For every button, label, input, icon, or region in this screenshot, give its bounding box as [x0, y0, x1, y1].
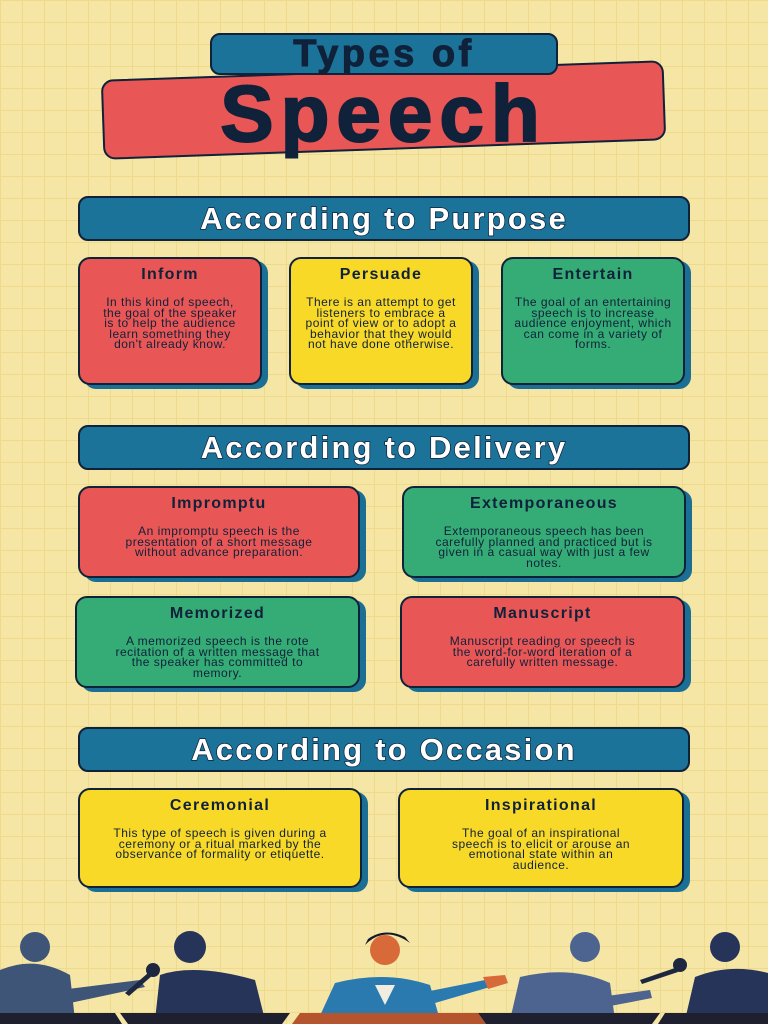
- card: Manuscript: [400, 596, 685, 688]
- card: Inform: In this kind of speech, the goal of the speaker is to help the audience learn something they don't already know.: [103, 295, 237, 351]
- card: Persuade: [289, 257, 473, 385]
- card: Inspirational: The goal of an inspirational speech is to elicit or arouse an emotional state within an audience.: [452, 826, 630, 872]
- card: Impromptu: Impromptu: [171, 495, 267, 512]
- title text: Speech: Speech: [220, 69, 547, 158]
- card: Inspirational: [398, 788, 684, 888]
- card: Persuade: There is an attempt to get listeners to embrace a point of view or to adopt a behavior that they would not have done otherwise.: [306, 295, 456, 351]
- card: Impromptu: An impromptu speech is the presentation of a short message without advance preparation.: [126, 524, 312, 559]
- card: Inform: Inform: [141, 266, 199, 283]
- heading: According to Purpose: According to Purpose: [200, 201, 568, 236]
- title: Types of: Types of: [293, 33, 475, 75]
- person right 2: [685, 932, 768, 1020]
- illustration: speakers and reporters: [0, 931, 768, 1024]
- title: Types of: [210, 33, 558, 75]
- card: Ceremonial: This type of speech is given during a ceremony or a ritual marked by the observance of formality or etiquette.: [113, 826, 327, 861]
- person left 2: [155, 931, 265, 1020]
- card: Entertain: The goal of an entertaining speech is to increase audience enjoyment, which can come in a variety of forms.: [514, 295, 672, 351]
- card: Persuade: Persuade: [340, 266, 422, 283]
- card: Memorized: [75, 596, 360, 688]
- title: Speech: [101, 60, 666, 160]
- card: Inspirational: Inspirational: [485, 797, 597, 814]
- card: Extemporaneous: [402, 486, 686, 578]
- heading: According to Purpose: [78, 196, 690, 241]
- mic: [125, 963, 160, 996]
- card: Ceremonial: Ceremonial: [170, 797, 270, 814]
- desks: [0, 1013, 122, 1024]
- card: Manuscript: Manuscript reading or speech is the word-for-word iteration of a carefully written message.: [450, 634, 635, 669]
- card: Extemporaneous: Extemporaneous: [470, 495, 618, 512]
- card: Entertain: Entertain: [552, 266, 634, 283]
- card: Memorized: Memorized: [170, 605, 265, 622]
- person right 1: [510, 932, 652, 1020]
- mic right: [640, 958, 687, 984]
- heading: According to Delivery: According to Delivery: [201, 430, 567, 465]
- card: Manuscript: Manuscript: [493, 605, 592, 622]
- card: Memorized: A memorized speech is the rote recitation of a written message that the speaker has committed to memory.: [115, 634, 320, 680]
- person left 1: [0, 932, 145, 1020]
- card: Entertain: [501, 257, 685, 385]
- heading: According to Delivery: [78, 425, 690, 470]
- card: Inform: [78, 257, 262, 385]
- heading: According to Occasion: According to Occasion: [191, 732, 577, 767]
- card: Impromptu: [78, 486, 360, 578]
- speaker: [318, 932, 508, 1020]
- card: Ceremonial: [78, 788, 362, 888]
- card: Extemporaneous: Extemporaneous speech has been carefully planned and practiced but is given in a casual way with just a few notes.: [435, 524, 653, 570]
- heading: According to Occasion: [78, 727, 690, 772]
